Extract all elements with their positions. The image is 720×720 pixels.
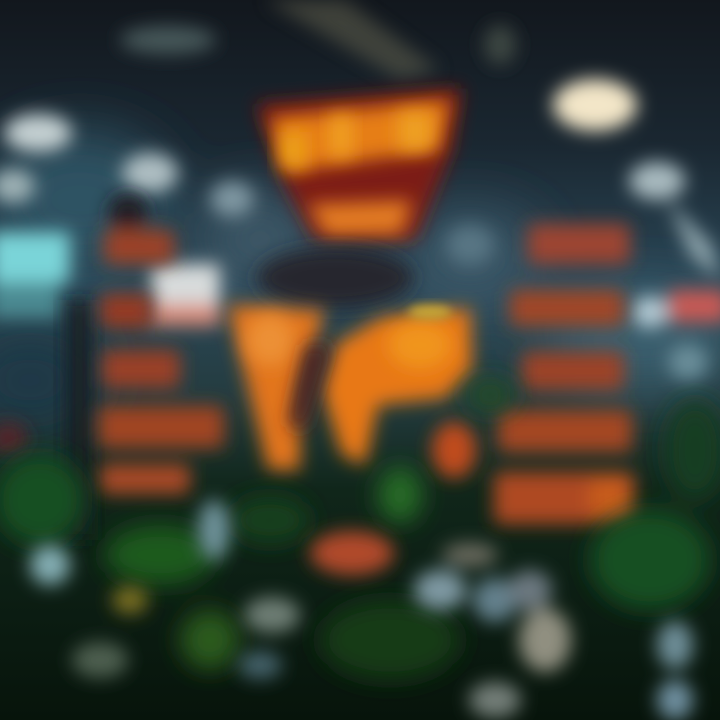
cyan and white glow panels <box>0 232 720 454</box>
bottom orange label <box>310 531 394 575</box>
right red label stack <box>494 224 634 524</box>
ceiling and mid-wall tones <box>0 130 720 430</box>
dark post <box>66 300 92 540</box>
ceiling lights <box>0 25 720 280</box>
dark central band <box>257 248 413 308</box>
central orange map shape <box>228 305 476 478</box>
green foliage <box>0 379 720 680</box>
pale blurred foliage highlights <box>30 500 693 720</box>
top orange funnel sign <box>256 88 462 240</box>
ceiling beam <box>265 0 440 80</box>
left red label stack <box>98 194 224 494</box>
